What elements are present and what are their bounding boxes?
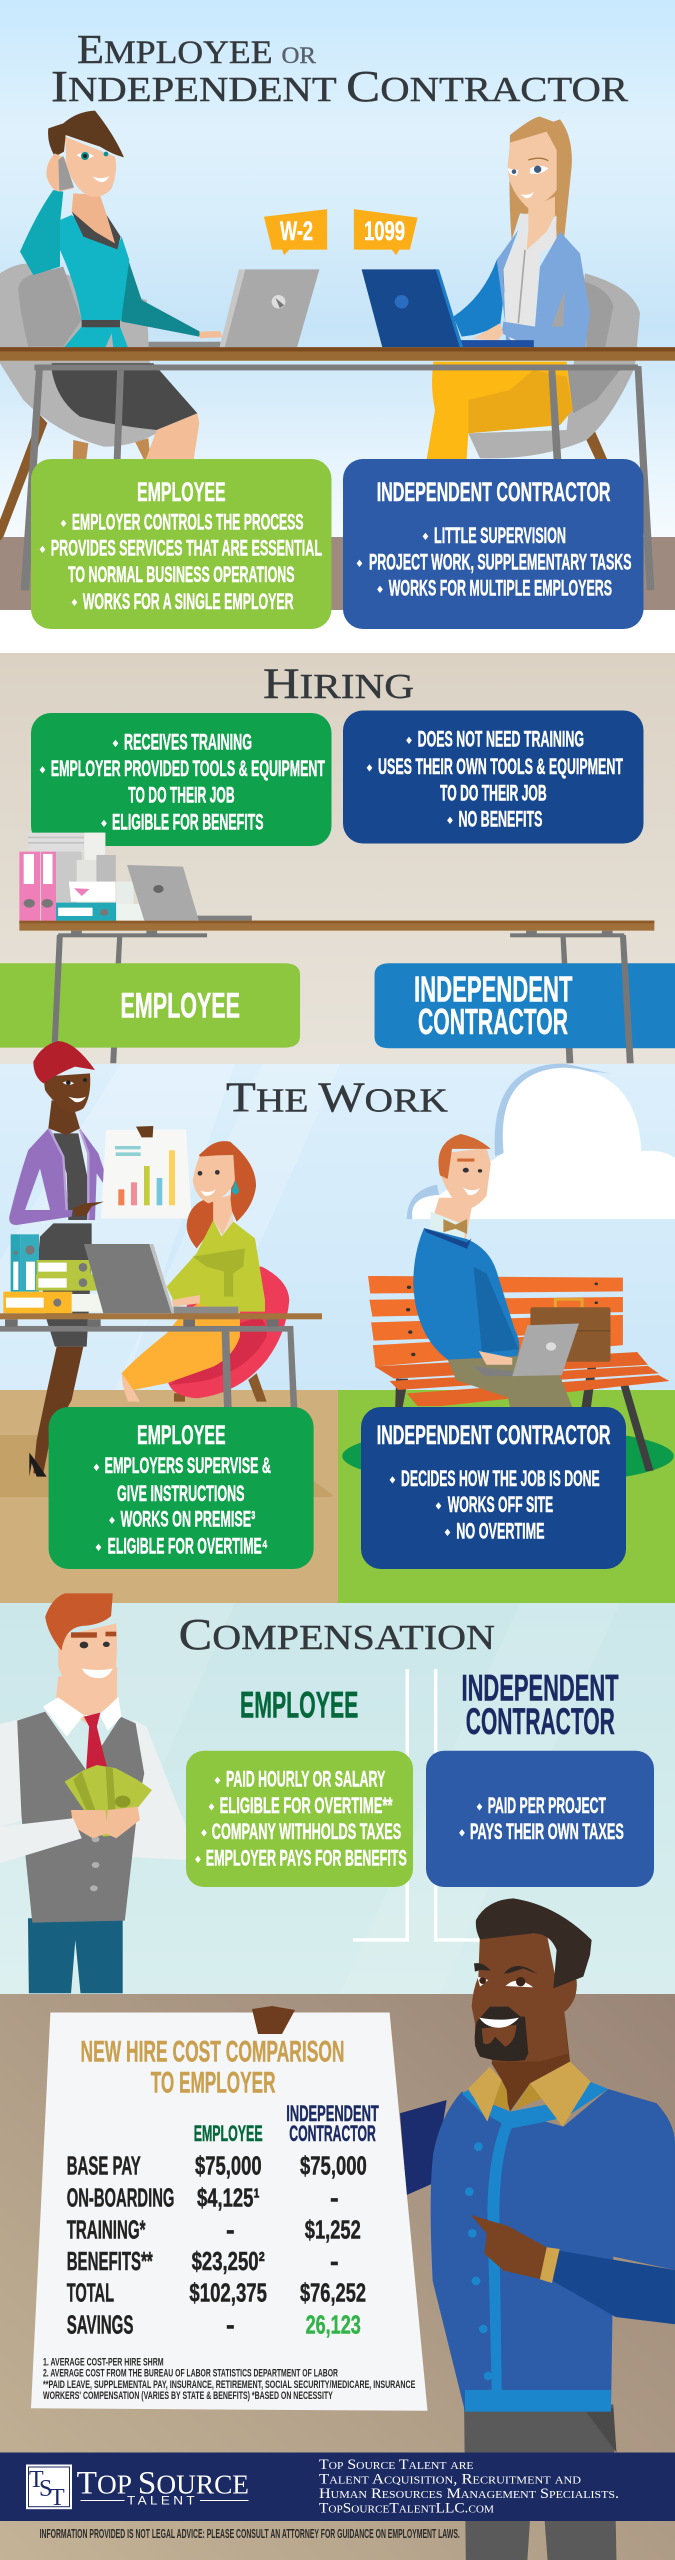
collar: [468, 2062, 591, 2127]
section 3 background: [0, 1064, 675, 1603]
panel: hiring contractor: ♦: [404, 736, 413, 747]
panel: contractor summary: LITTLE SUPERVISION: [434, 523, 566, 548]
table rows: TRAINING*: [67, 2214, 146, 2244]
table rows: $23,250²: [192, 2246, 265, 2276]
person: supervisor presenting: [9, 1041, 104, 1477]
panel: compensation employee: ♦: [207, 1802, 216, 1814]
W-2 label: W-2: [280, 216, 313, 246]
icon: cloud: [407, 1063, 675, 1219]
company description: [319, 2457, 619, 2516]
sheet title: TO EMPLOYER: [151, 2066, 276, 2100]
panel: compensation employee: PAID HOURLY OR SALARY: [226, 1767, 385, 1792]
panel: hiring contractor: ♦: [446, 816, 454, 827]
panel: employee summary: EMPLOYEE: [137, 477, 226, 507]
illustration: laptops and table: [0, 209, 675, 590]
illustration: contractor park scene: [342, 1063, 675, 1485]
person: employee on phone with chair: [0, 111, 223, 462]
table headers: EMPLOYEE: [194, 2121, 263, 2146]
person: seated employee: [122, 1141, 289, 1402]
panel: compensation employee: [186, 1751, 413, 1887]
icon: desk laptop: [84, 1244, 238, 1314]
1099 label: 1099: [364, 216, 405, 246]
panel: work employee: GIVE INSTRUCTIONS: [117, 1481, 244, 1506]
illustration: office desk with binders and laptop: [0, 833, 675, 1063]
panel: cost comparison sheet: [31, 2006, 428, 2411]
person: contractor with chair: [427, 117, 640, 459]
table headers: CONTRACTOR: [289, 2121, 376, 2146]
icon: park bench: [368, 1276, 669, 1472]
panel: work employee: ELIGIBLE FOR OVERTIME⁴: [108, 1534, 268, 1558]
panel: hiring contractor: NO BENEFITS: [458, 807, 542, 832]
person: suit body: [0, 1667, 194, 1993]
footnotes: WORKERS' COMPENSATION (VARIES BY STATE & BENEFITS) *BASED ON NECESSITY: [43, 2390, 333, 2402]
illustration: office presentation scene: [0, 1041, 322, 1477]
panel: work contractor: [361, 1407, 626, 1569]
panel: employee summary: ♦: [70, 598, 79, 609]
panel: work contractor: ♦: [434, 1502, 443, 1512]
table rows: BASE PAY: [67, 2151, 141, 2181]
panel: compensation contractor: ♦: [475, 1802, 484, 1814]
section 5 background: [0, 1994, 675, 2560]
column heading: employee: EMPLOYEE: [240, 1684, 358, 1725]
panel: compensation employee: ♦: [200, 1828, 208, 1840]
icon: left chair: [0, 264, 157, 462]
sleeve, cuff and pointing hand: [471, 2215, 675, 2324]
panel: hiring employee: ♦: [100, 819, 108, 830]
panel: compensation contractor: [426, 1751, 654, 1887]
sheet title: [80, 2036, 344, 2100]
section 4 background: [0, 1603, 675, 1994]
heading: hiring: HIRING: [263, 661, 414, 708]
panel: work employee: ♦: [92, 1463, 101, 1474]
logo: wordmark: TALENT: [127, 2494, 198, 2508]
panel: hiring employee: RECEIVES TRAINING: [124, 729, 252, 754]
company description: Talent Acquisition, Recruitment and: [319, 2472, 581, 2488]
icon: contractor laptop: [473, 1323, 579, 1376]
panel: hiring employee: TO DO THEIR JOB: [128, 783, 235, 808]
panel: work employee: ♦: [108, 1516, 116, 1527]
panel: employee summary: ♦: [38, 545, 47, 556]
panel: work employee: [49, 1407, 314, 1569]
neck: [492, 2017, 570, 2112]
person: presenter legs: [464, 2405, 616, 2560]
icon: laptop: [127, 865, 252, 921]
icon: pink binders: [19, 852, 56, 921]
panel: hiring employee: ♦: [111, 739, 120, 750]
table: [0, 347, 675, 590]
panel: compensation employee: ELIGIBLE FOR OVERTIME**: [220, 1793, 393, 1818]
table rows: TOTAL: [67, 2278, 114, 2308]
panel: employee summary: ♦: [59, 519, 68, 530]
panel: work employee: WORKS ON PREMISE³: [120, 1507, 255, 1532]
logo: TST monogram: T: [29, 2467, 44, 2493]
section 2 background: [0, 653, 675, 1065]
icon: cash fan: [0, 1765, 152, 1863]
heading: the work: THE WORK: [226, 1076, 449, 1122]
panel: employee summary: WORKS FOR A SINGLE EMPLOYER: [83, 589, 294, 614]
heading: compensation: COMPENSATION: [179, 1610, 495, 1659]
panel: hiring employee: EMPLOYER PROVIDED TOOLS & EQUIPMENT: [51, 756, 325, 781]
panel: compensation employee: EMPLOYER PAYS FOR BENEFITS: [206, 1846, 407, 1871]
desk underside (behind bars): [110, 937, 573, 1063]
column heading: contractor: [462, 1668, 619, 1742]
panel: hiring employee: [31, 713, 332, 846]
chair legs at the floor: [0, 415, 608, 541]
logo: TST monogram: [26, 2464, 72, 2511]
desk: [19, 921, 654, 1063]
person: presenter upper body: [400, 1898, 675, 2412]
table rows: $75,000: [300, 2151, 367, 2181]
table rows: ON-BOARDING: [67, 2183, 174, 2213]
icon: grey laptop: [149, 269, 319, 347]
icon: shaded ground ellipse: [342, 1427, 674, 1485]
footnotes: 2. AVERAGE COST FROM THE BUREAU OF LABOR STATISTICS DEPARTMENT OF LABOR: [43, 2368, 338, 2380]
desk: [0, 1313, 322, 1408]
table rows: BENEFITS**: [67, 2246, 153, 2276]
panel: hiring employee: ELIGIBLE FOR BENEFITS: [112, 809, 264, 834]
logo: wordmark: TOP SOURCE: [77, 2466, 249, 2502]
company description: Human Resources Management Specialists.: [319, 2486, 619, 2502]
shirt torso: [431, 2089, 675, 2412]
panel: work contractor: ♦: [443, 1528, 452, 1539]
panel: contractor summary: [343, 459, 644, 629]
table rows: -: [330, 2183, 339, 2213]
table headers: INDEPENDENT: [286, 2101, 379, 2126]
table rows: SAVINGS: [67, 2310, 134, 2340]
table headers: [194, 2101, 379, 2146]
company description: Top Source Talent are: [319, 2457, 474, 2473]
sheet of paper: [31, 2012, 428, 2411]
panel: contractor summary: ♦: [355, 559, 364, 570]
icon: 1099 speech bubble: [354, 209, 418, 255]
company description: TopSourceTalentLLC.com: [319, 2500, 494, 2516]
shirt trim: [462, 2082, 611, 2412]
icon: envelope and teal binder: [56, 882, 145, 921]
panel: employee summary: EMPLOYER CONTROLS THE PROCESS: [72, 510, 304, 534]
illustration: man holding cash: [0, 1593, 194, 1993]
logo: TST monogram: T: [50, 2485, 65, 2511]
footer band: [0, 2452, 675, 2521]
footnotes: 1. AVERAGE COST-PER HIRE SHRM: [43, 2357, 164, 2369]
person: contractor on bench: [413, 1134, 573, 1408]
title: [51, 26, 629, 111]
section 1 background: [0, 0, 675, 653]
icon: briefcase: [530, 1299, 610, 1362]
logo: TST monogram: S: [39, 2476, 52, 2502]
panel: contractor summary: ♦: [421, 532, 430, 543]
icon: binders on desk: [3, 1234, 103, 1313]
table rows: -: [226, 2310, 235, 2340]
table rows: 26,123: [306, 2310, 361, 2340]
title: EMPLOYEE OR: [77, 26, 317, 72]
panel: hiring contractor: [343, 710, 644, 844]
panel: work contractor: NO OVERTIME: [456, 1519, 545, 1544]
footnotes: **PAID LEAVE, SUPPLEMENTAL PAY, INSURANCE, RETIREMENT, SOCIAL SECURITY/MEDICARE, INSURANCE: [43, 2379, 415, 2391]
table rows: $1,252: [305, 2214, 361, 2244]
table rows: [67, 2151, 367, 2340]
icon: right chair: [468, 273, 640, 458]
panel: work employee: EMPLOYERS SUPERVISE &: [105, 1453, 271, 1478]
icon: paper stacks: [28, 833, 116, 905]
table rows: $4,125¹: [197, 2183, 260, 2213]
panel: hiring employee: ♦: [38, 766, 47, 776]
table rows: $76,252: [300, 2278, 366, 2308]
panel: work employee: EMPLOYEE: [137, 1420, 226, 1450]
panel: compensation employee: ♦: [213, 1776, 222, 1787]
employee bar label: EMPLOYEE: [120, 987, 240, 1026]
panel: contractor summary: ♦: [376, 585, 384, 596]
panel: work employee: ♦: [94, 1543, 103, 1554]
table rows: -: [226, 2214, 235, 2244]
icon: presenter fist: [252, 2006, 295, 2034]
panel: employee bar: [0, 963, 300, 1048]
icon: W-2 speech bubble: [264, 209, 327, 255]
sheet title: NEW HIRE COST COMPARISON: [80, 2036, 344, 2069]
table rows: $102,375: [189, 2278, 267, 2308]
panel: work contractor: ♦: [388, 1476, 397, 1486]
title: INDEPENDENT CONTRACTOR: [51, 62, 629, 111]
panel: compensation employee: COMPANY WITHHOLDS TAXES: [212, 1819, 401, 1844]
person: suit head: [45, 1593, 117, 1690]
panel: contractor bar: [375, 963, 675, 1048]
table rows: -: [330, 2246, 339, 2276]
panel: employee summary: [31, 459, 332, 629]
panel: employee summary: TO NORMAL BUSINESS OPERATIONS: [68, 562, 294, 587]
contractor bar label: INDEPENDENT: [414, 969, 573, 1010]
panel: hiring contractor: ♦: [365, 764, 374, 774]
table rows: $75,000: [195, 2151, 262, 2181]
icon: blue laptop: [362, 269, 534, 347]
divider brackets: [353, 1669, 482, 1942]
panel: compensation contractor: ♦: [458, 1828, 466, 1840]
icon: bar chart poster: [73, 1126, 192, 1218]
head: [472, 1898, 592, 2062]
contractor bar label: [414, 969, 573, 1042]
far arm: [400, 2100, 447, 2195]
panel: hiring contractor: TO DO THEIR JOB: [440, 781, 547, 806]
panel: work contractor: WORKS OFF SITE: [448, 1492, 553, 1517]
panel: compensation employee: ♦: [194, 1855, 202, 1866]
contractor bar label: CONTRACTOR: [418, 1001, 568, 1042]
panel: employee summary: PROVIDES SERVICES THAT ARE ESSENTIAL: [51, 536, 322, 561]
footnotes: [43, 2357, 415, 2402]
